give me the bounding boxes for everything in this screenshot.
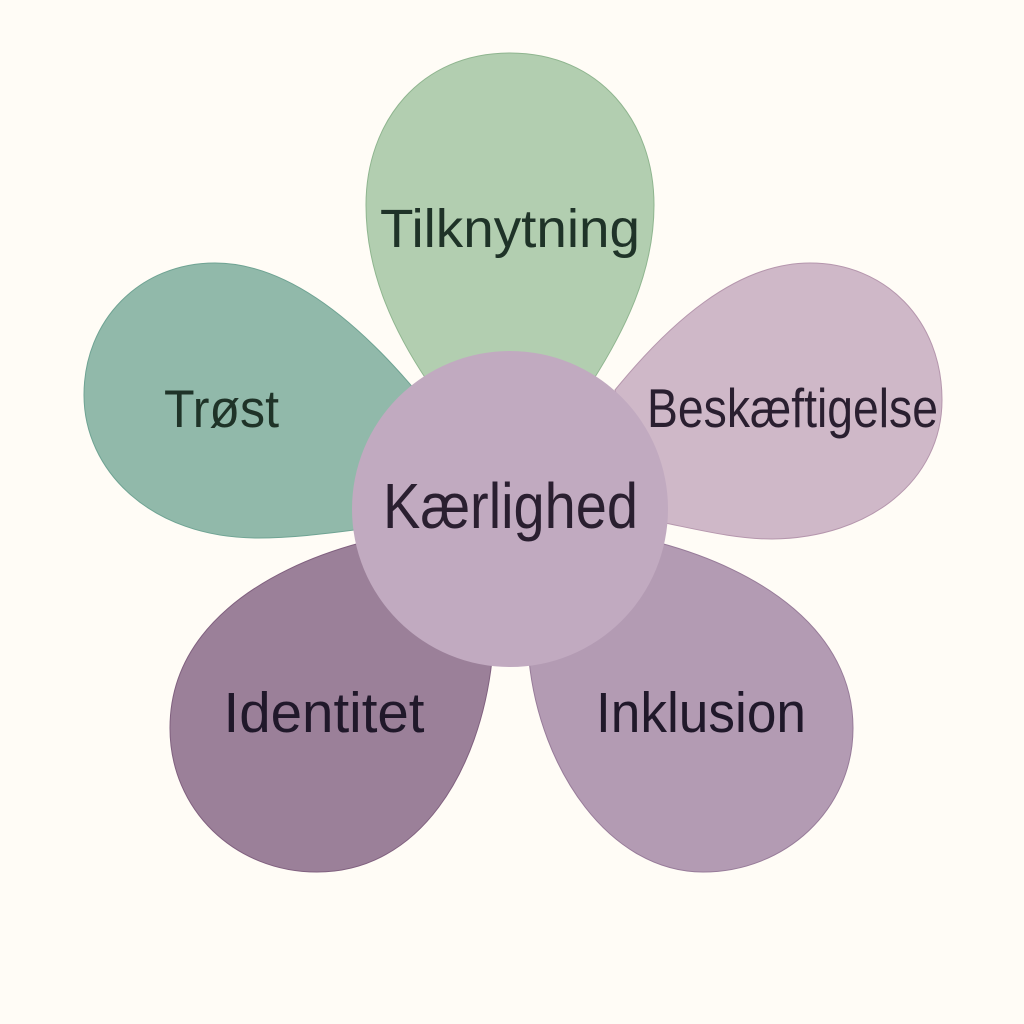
petal: Identitet (170, 543, 492, 872)
petal: Trøst (84, 263, 415, 538)
petal: Tilknytning (366, 53, 654, 385)
center circle: Kærlighed (352, 351, 668, 667)
petal: Identitet: Identitet (224, 681, 425, 745)
petal: Beskæftigelse: Beskæftigelse (647, 377, 938, 439)
petal: Beskæftigelse (615, 263, 942, 539)
petal: Trøst: Trøst (164, 380, 279, 439)
petal: Inklusion (529, 543, 853, 872)
petal: Inklusion: Inklusion (596, 681, 806, 745)
petal: Tilknytning: Tilknytning (380, 199, 640, 259)
center circle: Kærlighed: Kærlighed (383, 470, 638, 542)
